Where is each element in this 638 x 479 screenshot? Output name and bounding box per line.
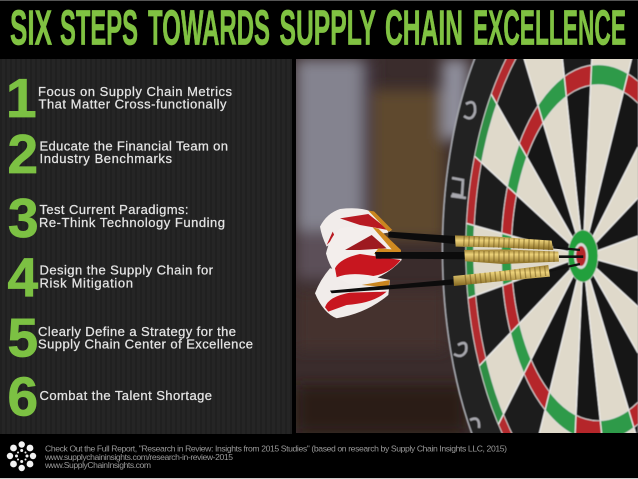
dart 2 middle [326, 227, 584, 278]
step 6 [8, 366, 212, 428]
step 1 [6, 67, 232, 129]
footer text [44, 444, 507, 470]
step 5: Supply Chain Center of Excellence [38, 336, 253, 351]
step 2 [8, 123, 228, 185]
number ring hooks [451, 102, 479, 428]
photo background [296, 59, 474, 433]
title: CHAIN [385, 2, 463, 56]
footer logo [7, 441, 36, 471]
footer text: Check Out the Full Report, "Research in Review: Insights from 2015 Studies" (based on research by Supply Chain Insights LLC, 2015) [45, 444, 507, 454]
step 1: Focus on Supply Chain Metrics [38, 84, 232, 99]
footer text: www.SupplyChainInsights.com [44, 460, 151, 470]
step 2: Industry Benchmarks [40, 151, 172, 166]
title: TOWARDS [148, 2, 270, 56]
step 1: That Matter Cross-functionally [38, 96, 227, 112]
step 4: Design the Supply Chain for [40, 263, 214, 278]
footer text: www.supplychaininsights.com/research-in-review-2015 [44, 452, 233, 462]
step 5: Clearly Define a Strategy for the [38, 324, 236, 339]
title: STEPS [60, 2, 138, 56]
step 6: 6 [8, 366, 38, 428]
step 2: 2 [8, 123, 38, 185]
step 2: Educate the Financial Team on [40, 138, 228, 154]
bottom edge strip [0, 478, 638, 479]
title: SUPPLY [280, 2, 376, 56]
step 5 [8, 306, 253, 368]
dart 1 upper [320, 208, 580, 250]
step 4: Risk Mitigation [40, 275, 133, 290]
panel: six steps [0, 59, 292, 434]
step 3: Test Current Paradigms: [40, 202, 188, 217]
step 5: 5 [8, 306, 38, 368]
dartboard [440, 59, 638, 433]
dart 3 lower [315, 264, 580, 318]
step 3: 3 [8, 187, 39, 249]
top edge strip [0, 0, 638, 1]
title: SIX [10, 2, 52, 56]
bullseye [568, 230, 598, 282]
step 1: 1 [6, 67, 37, 129]
step 3: Re-Think Technology Funding [39, 215, 225, 230]
photo: dartboard with three darts [296, 55, 638, 441]
title [10, 2, 626, 56]
step 4 [8, 246, 214, 308]
step 6: Combat the Talent Shortage [40, 388, 212, 403]
step 3 [8, 187, 225, 249]
step 4: 4 [8, 246, 38, 308]
